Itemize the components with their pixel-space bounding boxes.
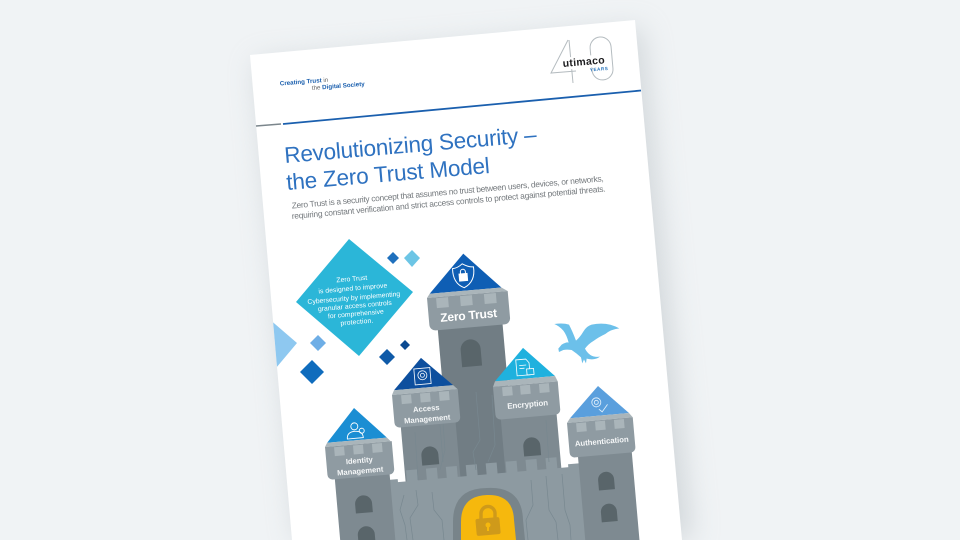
tagline: Creating Trust in: [280, 77, 329, 87]
tower body: zero trust: [438, 324, 508, 477]
intro text: Zero Trust is a security concept that assumes no trust between users, devices, or networks,: [291, 173, 604, 210]
tower head: access management: Management: [404, 412, 451, 426]
logo: utimaco 40 years: [551, 36, 614, 83]
tagline: [280, 77, 366, 92]
callout diamond: granular access controls: [318, 300, 393, 313]
tower: identity management: [325, 408, 396, 540]
tower: identity management: Management: [337, 464, 384, 478]
tower body: encryption: [501, 414, 562, 472]
callout diamond: for comprehensive: [328, 309, 384, 320]
tower: identity management: Identity: [345, 455, 374, 466]
tagline: the Digital Society: [312, 81, 366, 92]
icon: padlock: [475, 506, 501, 536]
tower head: access management: Access: [413, 403, 440, 414]
decorative diamonds: [268, 250, 420, 384]
title: [283, 122, 538, 195]
page shadow: [256, 28, 692, 540]
document page: [250, 20, 682, 540]
header rule: [256, 90, 641, 126]
tower head: encryption: [490, 345, 561, 420]
castle gate with padlock: [453, 488, 525, 540]
title: Revolutionizing Security –: [283, 122, 538, 168]
logo: utimaco 40 years: utimaco: [562, 54, 605, 70]
callout diamond: [296, 239, 413, 356]
castle wall with battlements: [387, 455, 590, 540]
tower: authentication: [567, 386, 640, 540]
tower body: access management: [400, 422, 460, 482]
intro text: requiring constant verification and strict access controls to protect against potential threats.: [291, 184, 606, 221]
tower head: access management: [389, 355, 461, 428]
logo: utimaco 40 years: YEARS: [590, 66, 608, 72]
callout diamond: Cybersecurity by implementing: [307, 291, 401, 306]
tower: authentication: Authentication: [574, 435, 629, 448]
circuit traces: [400, 392, 571, 540]
dragon: [554, 323, 619, 363]
tower head: zero trust: [423, 250, 511, 331]
tower window: [460, 339, 482, 367]
title: the Zero Trust Model: [285, 153, 491, 195]
tower head: zero trust: Zero Trust: [440, 306, 498, 325]
tower head: encryption: Encryption: [507, 398, 549, 411]
callout diamond: Zero Trust: [336, 275, 368, 284]
callout diamond: protection.: [340, 318, 374, 327]
callout diamond: is designed to improve: [318, 282, 388, 295]
icon: shield lock: [452, 263, 475, 289]
